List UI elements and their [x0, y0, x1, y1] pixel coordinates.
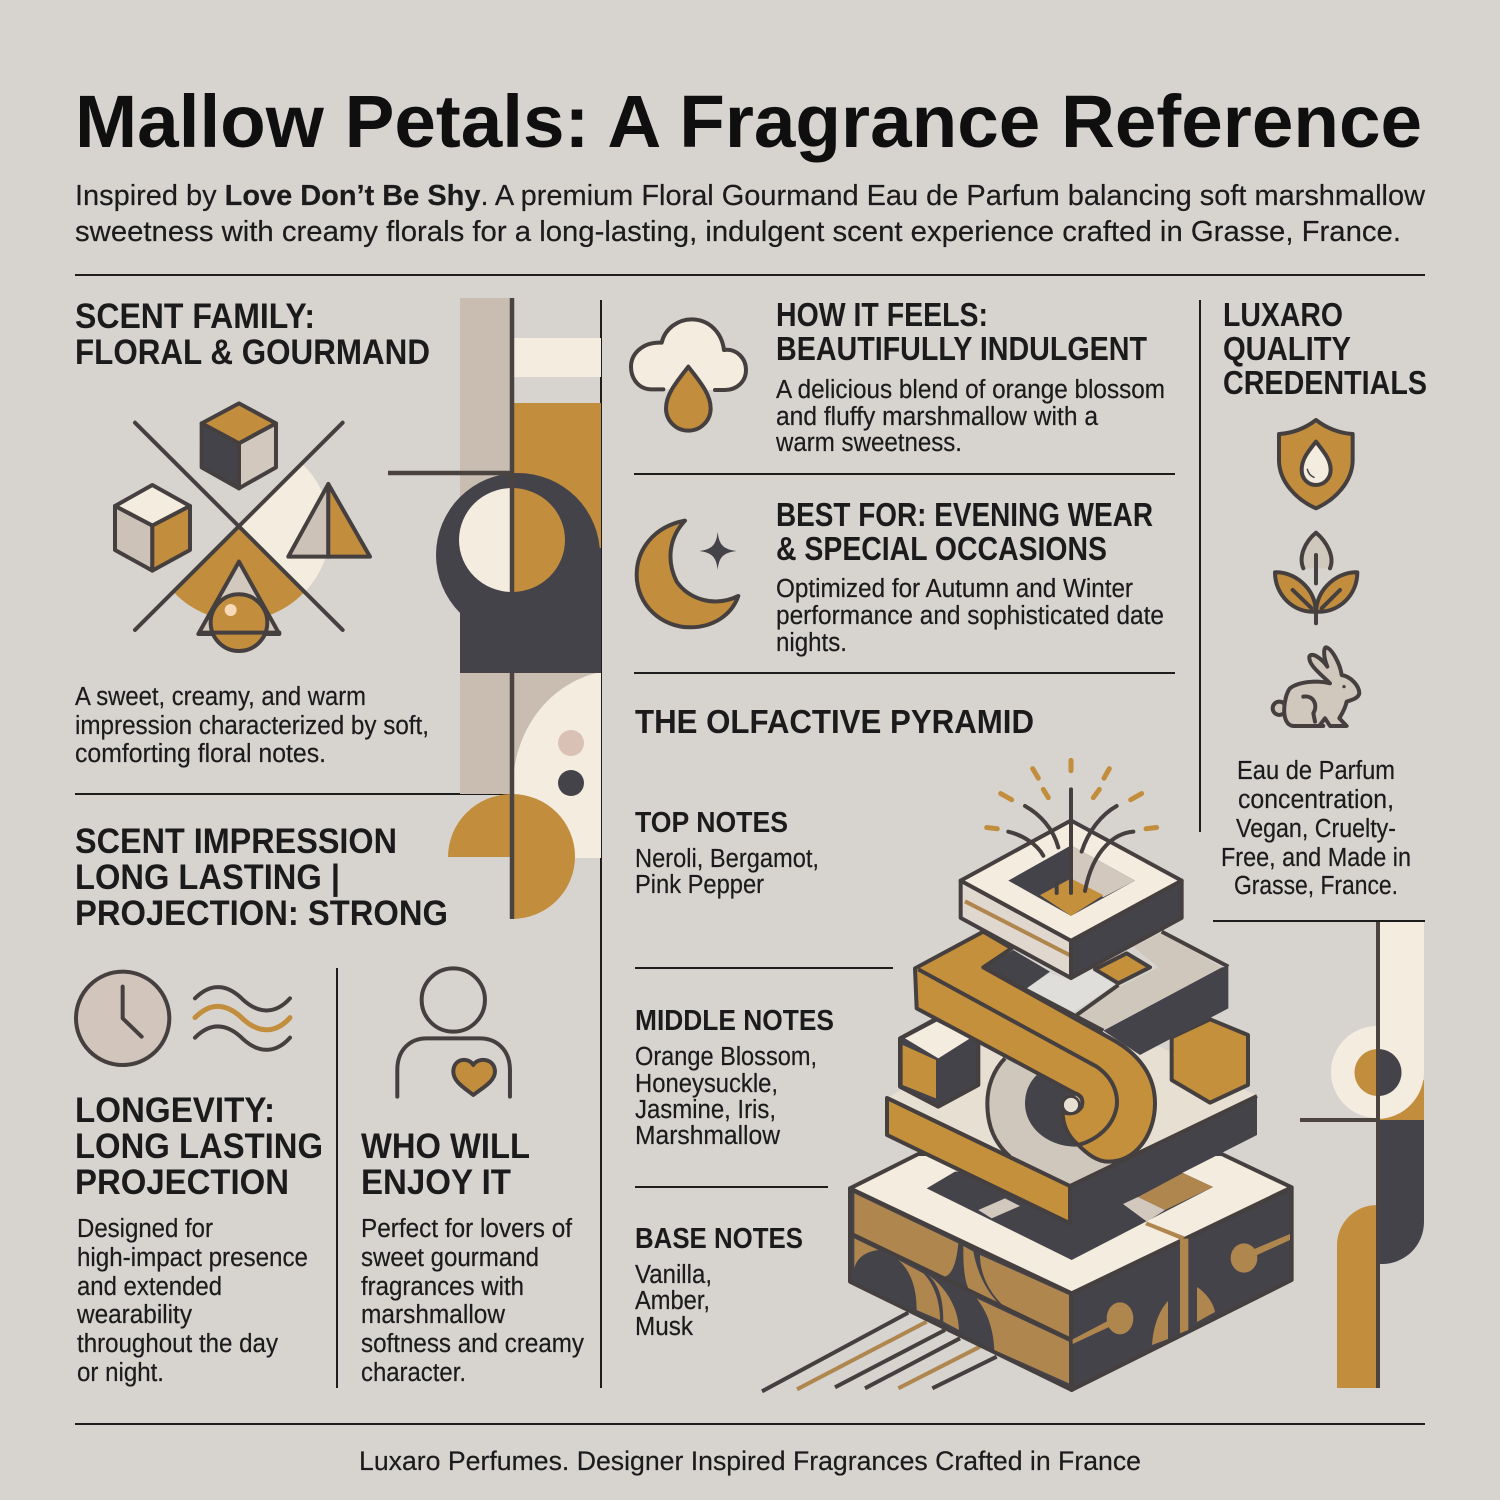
- decoration: right geometric column: [1300, 922, 1424, 1388]
- heading: scent family: SCENT FAMILY:: [75, 297, 315, 336]
- panel: who will enjoy it: [361, 968, 584, 1387]
- base notes: [635, 1223, 803, 1341]
- intro text: sweetness with creamy florals for a long-lasting, indulgent scent experience crafted in Grasse, France.: [75, 216, 1401, 248]
- base notes: BASE NOTES: [635, 1223, 803, 1255]
- heading: who will enjoy it: ENJOY IT: [361, 1163, 511, 1202]
- middle notes: Marshmallow: [635, 1122, 781, 1150]
- illustration: isometric pyramid: [762, 760, 1292, 1391]
- intro text: [75, 180, 1426, 248]
- title: Mallow Petals: A Fragrance Reference: [75, 80, 1422, 163]
- icon: clock: [76, 972, 169, 1065]
- side hexagon: [1172, 1019, 1248, 1103]
- text: credentials description: Grasse, France.: [1234, 872, 1398, 900]
- text: credentials description: Eau de Parfum: [1237, 757, 1395, 785]
- text: credentials description: Vegan, Cruelty-: [1236, 815, 1396, 843]
- icon: leaves: [1275, 533, 1357, 623]
- text: how it feels description: [775, 376, 1165, 457]
- top layer: [961, 760, 1182, 978]
- text: longevity description: or night.: [77, 1359, 164, 1387]
- gold spiral ribbon: [915, 932, 1155, 1162]
- heading: best for: [776, 496, 1153, 567]
- top notes: [635, 807, 819, 899]
- heading: scent impression: LONG LASTING |: [75, 858, 340, 897]
- heading: scent impression: [75, 822, 448, 933]
- heading: luxaro quality credentials: [1223, 296, 1427, 401]
- icon: scent waves: [195, 987, 290, 1050]
- decoration: left geometric column: [388, 298, 601, 919]
- text: best for description: [776, 575, 1164, 657]
- heading: scent family: FLORAL & GOURMAND: [75, 333, 430, 372]
- heading: best for: BEST FOR: EVENING WEAR: [776, 496, 1153, 533]
- text: who will enjoy it description: Perfect for lovers of: [361, 1215, 573, 1243]
- heading: longevity: [75, 1091, 323, 1202]
- text: scent family description: impression characterized by soft,: [75, 712, 429, 740]
- top notes: Pink Pepper: [635, 871, 764, 899]
- text: who will enjoy it description: sweet gourmand: [361, 1244, 539, 1272]
- panel: longevity: [75, 972, 323, 1387]
- text: credentials description: [1221, 757, 1411, 900]
- heading: scent impression: SCENT IMPRESSION: [75, 822, 397, 861]
- upper layer: [983, 932, 1228, 1055]
- base notes: Amber,: [635, 1287, 710, 1315]
- icon: cubes and triangles cross: [115, 403, 370, 651]
- text: best for description: nights.: [776, 629, 847, 657]
- panel: quality credentials: [1221, 296, 1427, 900]
- panel: how it feels: [631, 296, 1165, 457]
- heading: scent family: [75, 297, 430, 372]
- heading: luxaro quality credentials: LUXARO: [1223, 296, 1343, 333]
- middle notes: Orange Blossom,: [635, 1043, 817, 1071]
- base notes: Musk: [635, 1313, 693, 1341]
- panel: scent family: [75, 297, 430, 768]
- text: longevity description: [76, 1215, 308, 1387]
- icon: moon and star: [637, 521, 738, 627]
- text: longevity description: throughout the day: [77, 1330, 278, 1358]
- text: who will enjoy it description: [361, 1215, 584, 1387]
- icon: person with heart: [397, 968, 510, 1097]
- icon: cloud and drop: [631, 319, 746, 431]
- text: scent family description: comforting floral notes.: [75, 740, 326, 768]
- text: longevity description: and extended: [77, 1273, 222, 1301]
- footer: Luxaro Perfumes. Designer Inspired Fragrances Crafted in France: [359, 1446, 1141, 1476]
- top notes: Neroli, Bergamot,: [635, 845, 819, 873]
- text: who will enjoy it description: character.: [361, 1359, 466, 1387]
- text: how it feels description: warm sweetness.: [775, 429, 962, 457]
- heading: best for: & SPECIAL OCCASIONS: [776, 530, 1107, 567]
- heading: scent impression: PROJECTION: STRONG: [75, 894, 448, 933]
- heading: longevity: LONGEVITY:: [75, 1091, 275, 1130]
- text: who will enjoy it description: marshmallow: [361, 1301, 506, 1329]
- middle layer: [887, 1047, 1257, 1230]
- heading: longevity: PROJECTION: [75, 1163, 289, 1202]
- text: credentials description: Free, and Made in: [1221, 844, 1411, 872]
- text: how it feels description: and fluffy marshmallow with a: [776, 403, 1099, 431]
- text: longevity description: wearability: [76, 1301, 192, 1329]
- heading: how it feels: HOW IT FEELS:: [776, 296, 988, 333]
- text: who will enjoy it description: fragrances with: [361, 1273, 524, 1301]
- heading: the olfactive pyramid: THE OLFACTIVE PYRAMID: [635, 703, 1034, 740]
- text: who will enjoy it description: softness and creamy: [361, 1330, 584, 1358]
- middle notes: MIDDLE NOTES: [635, 1005, 834, 1037]
- panel: best for: [637, 496, 1164, 657]
- text: scent family description: [75, 683, 429, 768]
- panel: olfactive pyramid: [635, 703, 1292, 1391]
- middle notes: Jasmine, Iris,: [635, 1096, 776, 1124]
- heading: how it feels: [776, 296, 1147, 367]
- text: best for description: Optimized for Autumn and Winter: [776, 575, 1133, 603]
- text: longevity description: Designed for: [77, 1215, 213, 1243]
- text: longevity description: high-impact presence: [77, 1244, 308, 1272]
- heading: luxaro quality credentials: QUALITY: [1223, 330, 1351, 367]
- heading: who will enjoy it: WHO WILL: [361, 1127, 530, 1166]
- heading: longevity: LONG LASTING: [75, 1127, 323, 1166]
- heading: how it feels: BEAUTIFULLY INDULGENT: [776, 330, 1147, 367]
- top notes: TOP NOTES: [635, 807, 788, 839]
- base notes: Vanilla,: [635, 1261, 712, 1289]
- text: how it feels description: A delicious blend of orange blossom: [776, 376, 1165, 404]
- heading: luxaro quality credentials: CREDENTIALS: [1223, 364, 1427, 401]
- text: scent family description: A sweet, creamy, and warm: [75, 683, 366, 711]
- base layer: [762, 1154, 1292, 1391]
- intro text: Inspired by Love Don’t Be Shy. A premium Floral Gourmand Eau de Parfum balancing soft marshmallow: [75, 180, 1426, 212]
- text: best for description: performance and sophisticated date: [776, 602, 1164, 630]
- side cube: [900, 1019, 978, 1107]
- heading: who will enjoy it: [361, 1127, 530, 1202]
- middle notes: Honeysuckle,: [635, 1070, 778, 1098]
- icon: rabbit: [1273, 647, 1359, 726]
- text: credentials description: concentration,: [1238, 786, 1394, 814]
- middle notes: [635, 1005, 834, 1150]
- icon: shield with drop: [1279, 420, 1353, 508]
